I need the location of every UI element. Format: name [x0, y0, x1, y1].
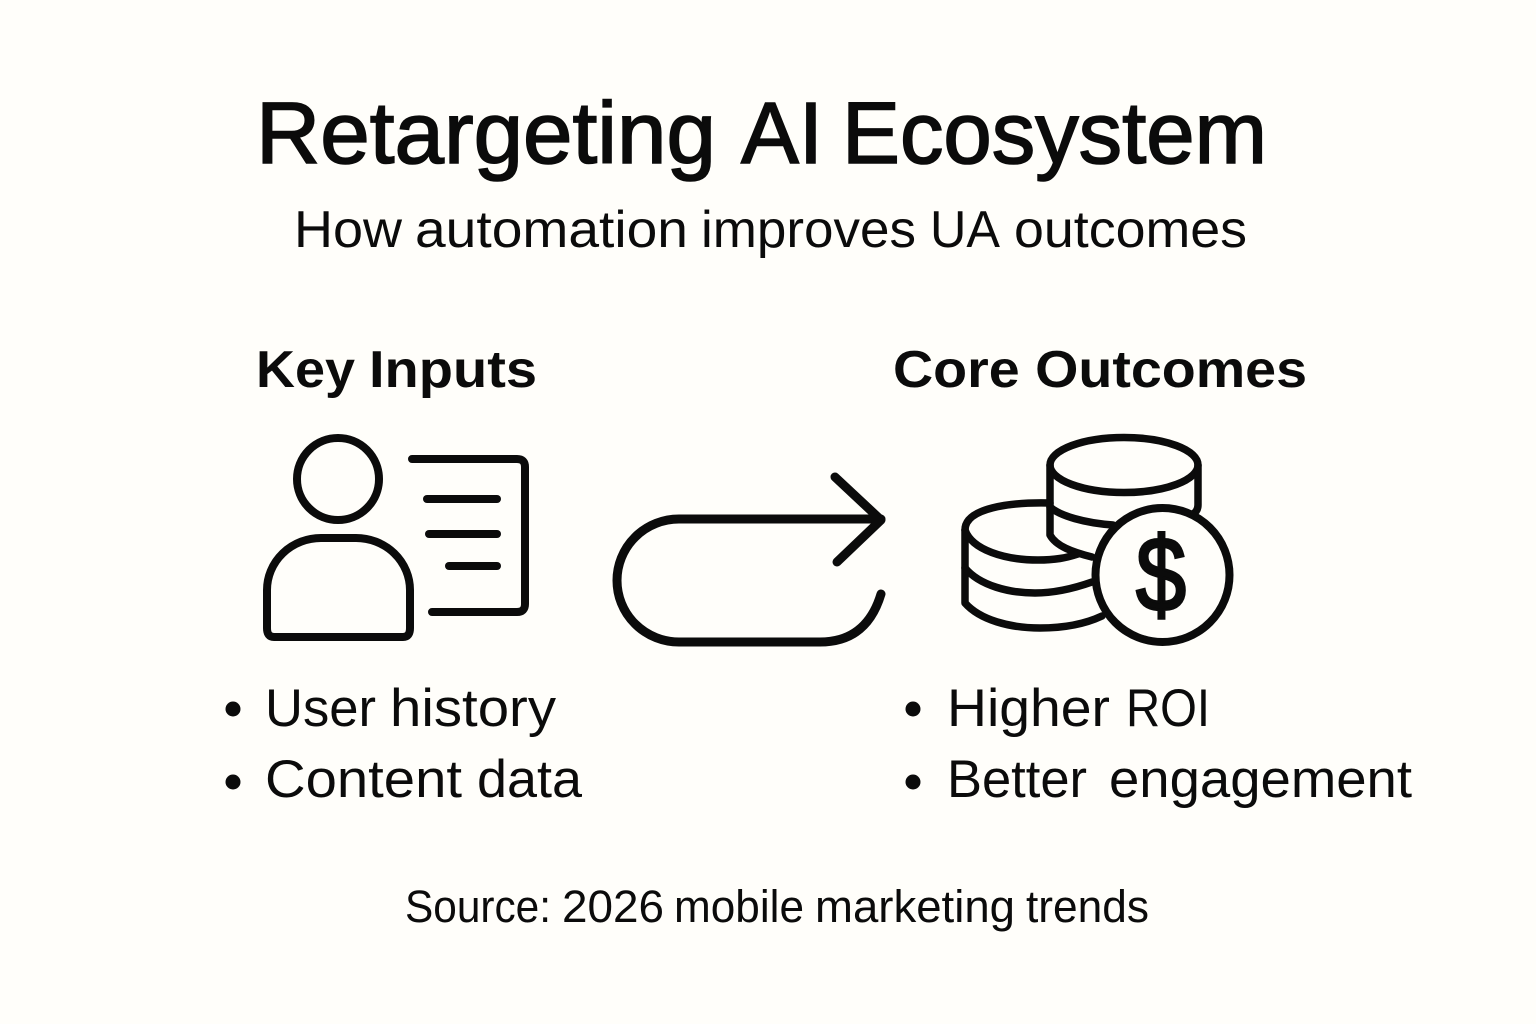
list: core outcomes: engagement: [1109, 750, 1412, 809]
list: core outcomes: ROI: [1126, 679, 1210, 738]
source note: mobile: [674, 881, 804, 932]
title: Retargeting: [256, 85, 716, 182]
source note: 2026: [562, 881, 664, 932]
heading: key inputs: Key: [256, 341, 355, 399]
subtitle: improves: [701, 201, 916, 259]
dollar sign: $: [1136, 516, 1186, 634]
icon: coin stacks with dollar: [965, 438, 1230, 642]
arrow: loop to outcomes: [617, 477, 881, 642]
heading: key inputs: [256, 341, 537, 399]
source note: Source:: [405, 881, 551, 932]
list: core outcomes: [906, 679, 1412, 809]
list: key inputs: User: [265, 679, 376, 738]
title: [256, 85, 1267, 182]
list: key inputs: data: [477, 750, 583, 809]
source note: trends: [1026, 881, 1149, 932]
list: core outcomes: Higher: [947, 679, 1110, 738]
heading: core outcomes: Core Outcomes: [893, 341, 1307, 399]
heading: key inputs: Inputs: [369, 341, 537, 399]
list: core outcomes: Better: [947, 750, 1087, 809]
source note: [405, 881, 1149, 932]
list: key inputs: [226, 679, 583, 809]
icon: user with document: [267, 438, 525, 637]
list: key inputs: history: [390, 679, 557, 738]
subtitle: UA: [930, 201, 1000, 259]
subtitle: automation: [415, 201, 688, 259]
subtitle: How: [294, 201, 402, 259]
list: key inputs: Content: [265, 750, 462, 809]
title: Ecosystem: [842, 85, 1267, 182]
source note: marketing: [815, 881, 1015, 932]
subtitle: outcomes: [1014, 201, 1247, 259]
title: AI: [741, 85, 823, 182]
subtitle: [294, 201, 1247, 259]
